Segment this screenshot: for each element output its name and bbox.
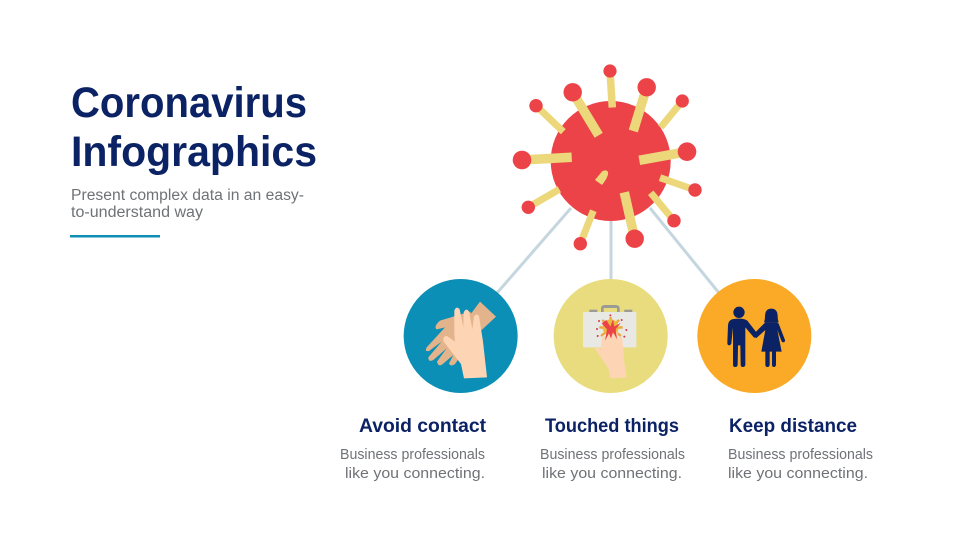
title bbox=[71, 79, 317, 176]
title underline bbox=[70, 235, 160, 238]
title: Coronavirus bbox=[71, 79, 307, 127]
text: keep distance: Business professionals bbox=[728, 447, 873, 463]
icon: virus bbox=[513, 64, 702, 250]
icon: touched things circle bbox=[554, 279, 668, 393]
title: Infographics bbox=[71, 128, 317, 176]
heading: keep distance: Keep distance bbox=[729, 416, 857, 437]
subtitle: Present complex data in an easy- bbox=[71, 187, 304, 204]
subtitle bbox=[71, 187, 304, 221]
germ burst bbox=[596, 314, 627, 338]
text: touched things bbox=[540, 447, 685, 482]
man bbox=[733, 307, 745, 318]
connector lines bbox=[497, 208, 719, 293]
text: avoid contact: Business professionals bbox=[340, 447, 485, 463]
text: keep distance bbox=[728, 447, 873, 482]
heading: touched things: Touched things bbox=[545, 416, 679, 437]
subtitle: to-understand way bbox=[71, 204, 203, 221]
text: keep distance: like you connecting. bbox=[728, 466, 868, 482]
hand bbox=[595, 332, 627, 378]
text: touched things: like you connecting. bbox=[542, 466, 682, 482]
text: avoid contact bbox=[340, 447, 485, 482]
icon: keep distance circle bbox=[697, 279, 811, 393]
icon: avoid contact circle bbox=[404, 279, 518, 393]
text: touched things: Business professionals bbox=[540, 447, 685, 463]
heading: avoid contact: Avoid contact bbox=[359, 416, 487, 437]
woman bbox=[764, 309, 779, 322]
germ streaks over fingers bbox=[602, 319, 621, 341]
text: avoid contact: like you connecting. bbox=[345, 466, 485, 482]
